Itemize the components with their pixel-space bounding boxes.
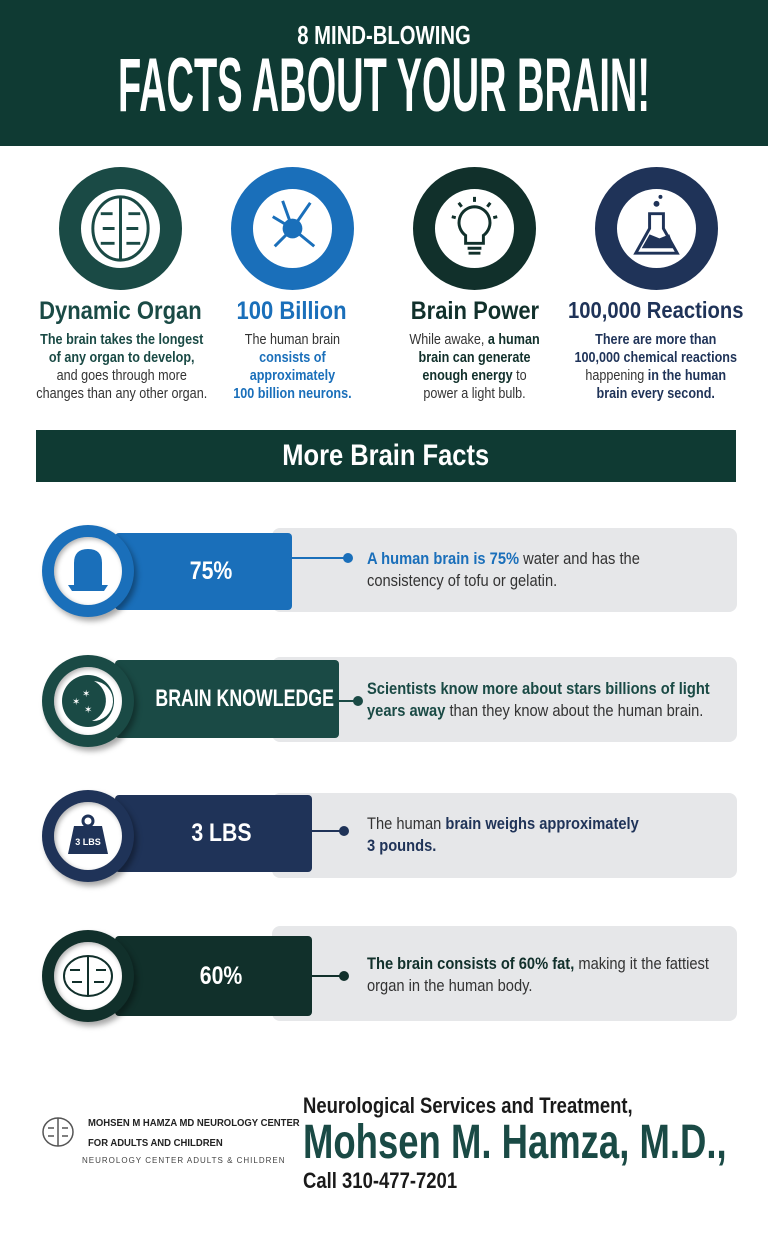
text: reactions: happening in the human — [586, 367, 726, 384]
banner: More Brain Facts: More Brain Facts — [283, 439, 489, 472]
row 2: brain knowledge: ✶ — [82, 689, 90, 700]
row 1: 75%: A human brain is 75% water and has the — [367, 550, 640, 568]
icon: lightbulb circle — [413, 167, 536, 290]
row 1: 75%: consistency of tofu or gelatin. — [367, 572, 557, 590]
text: 100 billion: 100 billion neurons. — [233, 385, 351, 402]
row 2: brain knowledge: ✶ — [72, 697, 80, 708]
row 2: brain knowledge: years away than they know about the human brain. — [367, 702, 703, 720]
heading: Brain Power: Brain Power — [411, 297, 539, 325]
text: brain power: enough energy to — [423, 367, 527, 384]
footer: contact: Mohsen M. Hamza, M.D., — [303, 1116, 727, 1169]
text: 100 billion: consists of — [259, 349, 325, 366]
footer: contact — [303, 1093, 727, 1193]
row 2: brain knowledge: ✶ — [84, 705, 92, 716]
banner: More Brain Facts — [36, 430, 736, 482]
text: 100 billion: The human brain — [244, 331, 340, 348]
text: brain power — [410, 331, 540, 402]
row 4: 60%: 60% — [200, 962, 242, 990]
heading: 100,000 Reactions: 100,000 Reactions — [568, 297, 744, 323]
row 3: 3 LBS: 3 pounds. — [367, 837, 436, 855]
text: reactions: 100,000 chemical reactions — [575, 349, 737, 366]
footer logo: MOHSEN M HAMZA MD NEUROLOGY CENTER — [88, 1118, 300, 1129]
row 2: brain knowledge: BRAIN KNOWLEDGE — [155, 685, 334, 712]
heading: Dynamic Organ: Dynamic Organ — [39, 297, 201, 325]
row 2: brain knowledge — [42, 655, 737, 754]
row 3: 3 LBS: The human brain weighs approximately — [367, 815, 639, 833]
row 3: 3 LBS — [42, 790, 737, 890]
icon: flask circle — [595, 167, 718, 290]
text: brain power: brain can generate — [419, 349, 531, 366]
text: 100 billion — [233, 331, 351, 402]
text: 100 billion: approximately — [249, 367, 335, 384]
row 1: 75%: 75% — [190, 557, 232, 585]
text: brain power: power a light bulb. — [424, 385, 526, 402]
text: dynamic organ: The brain takes the longest — [40, 331, 203, 348]
footer: contact: Neurological Services and Treatment, — [303, 1093, 633, 1118]
row 4: 60%: organ in the human body. — [367, 977, 532, 995]
footer logo: FOR ADULTS AND CHILDREN — [88, 1138, 223, 1149]
row 2: brain knowledge: Scientists know more about stars billions of light — [367, 680, 710, 698]
footer logo: NEUROLOGY CENTER ADULTS & CHILDREN — [82, 1156, 286, 1165]
footer: contact: Call 310-477-7201 — [303, 1168, 457, 1193]
text: reactions: There are more than — [595, 331, 717, 348]
header: FACTS ABOUT YOUR BRAIN! — [118, 43, 650, 128]
text: dynamic organ: changes than any other organ. — [36, 385, 207, 402]
row 1: 75% — [42, 525, 737, 624]
footer logo — [42, 1117, 300, 1165]
text: brain power: While awake, a human — [410, 331, 540, 348]
heading: 100 Billion: 100 Billion — [237, 297, 347, 325]
text: dynamic organ: and goes through more — [57, 367, 187, 384]
icon: neuron circle — [231, 167, 354, 290]
row 3: 3 LBS: 3 LBS — [191, 819, 251, 847]
row 4: 60%: The brain consists of 60% fat, making it the fattiest — [367, 955, 709, 973]
text: reactions — [575, 331, 737, 402]
icon: brain circle — [59, 167, 182, 290]
text: reactions: brain every second. — [597, 385, 715, 402]
row 3: 3 LBS: 3 LBS — [75, 837, 101, 847]
header: 8 MIND-BLOWING — [297, 20, 471, 50]
text: dynamic organ: of any organ to develop, — [49, 349, 195, 366]
header — [0, 0, 768, 146]
text: dynamic organ — [36, 331, 207, 402]
row 4: 60% — [42, 926, 737, 1030]
